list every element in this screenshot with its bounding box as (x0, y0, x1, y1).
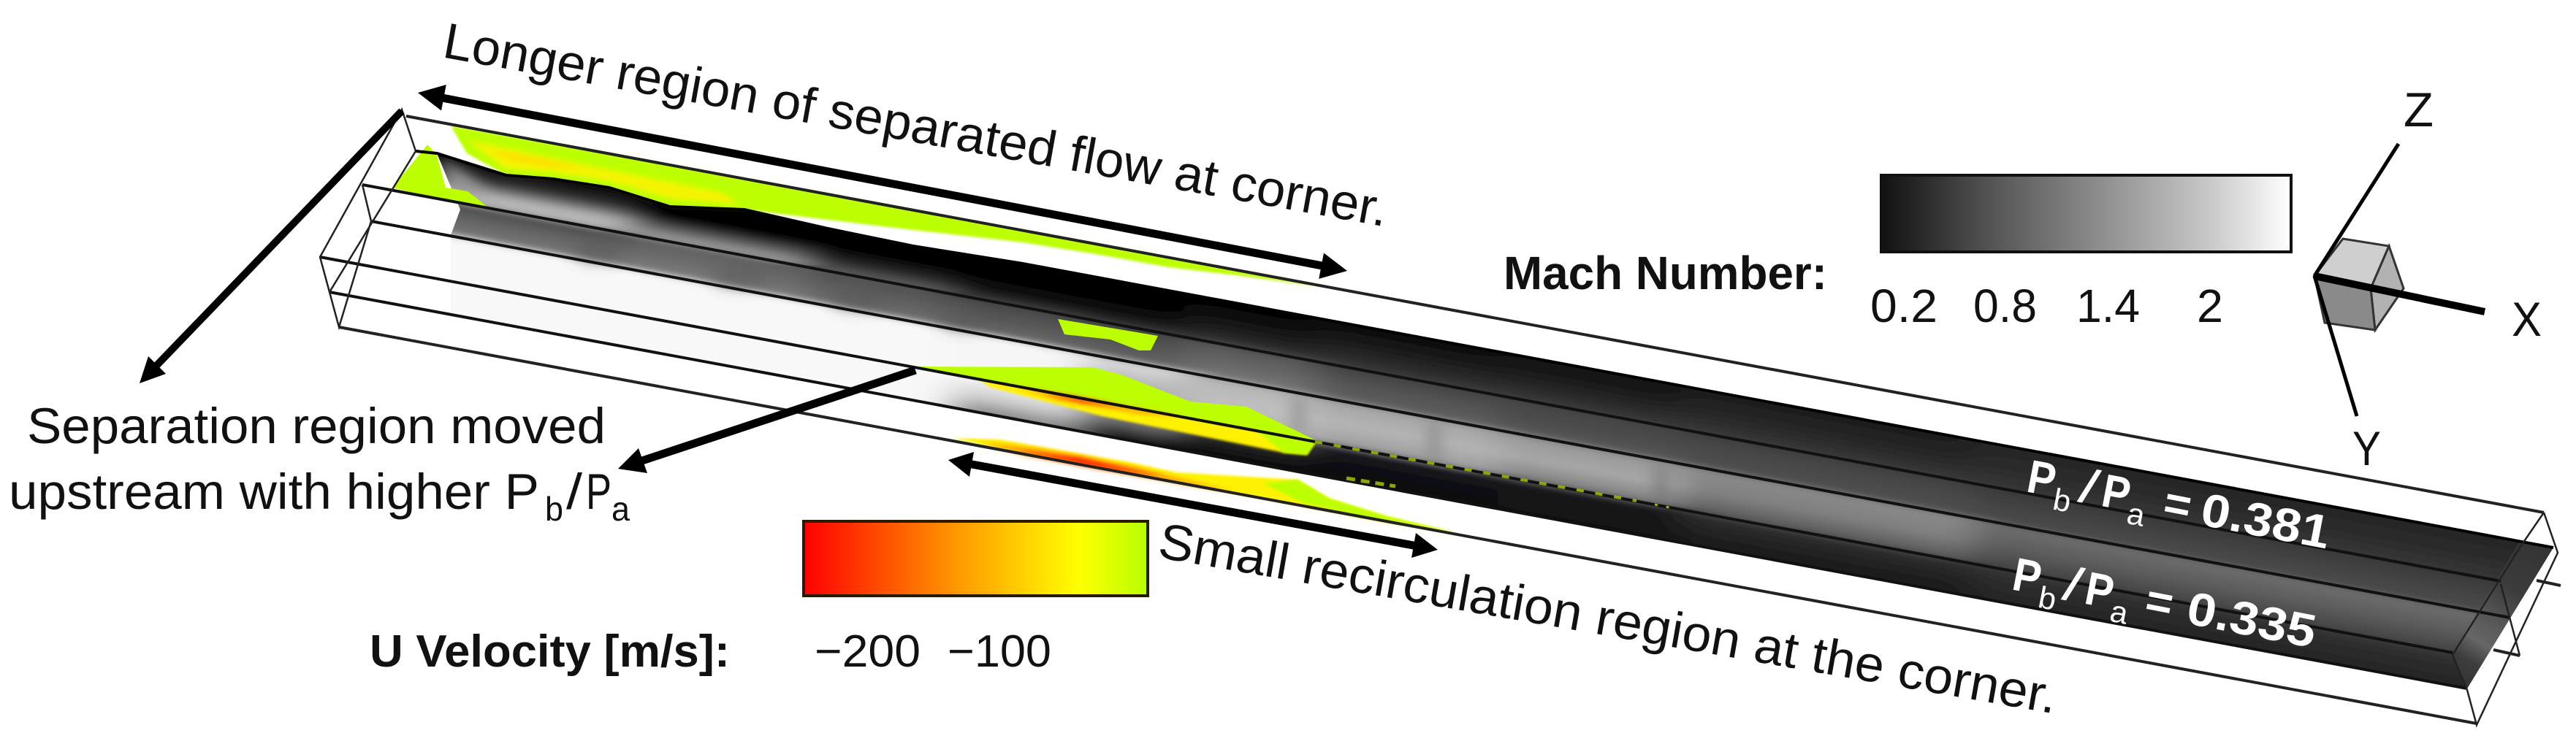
annotation: separation region moved upstream: / (566, 464, 583, 520)
icon: orientation axes with cube (2314, 83, 2542, 475)
label: Pb/Pa = 0.335: b (2035, 580, 2059, 617)
U velocity legend (370, 521, 1148, 677)
Mach number legend: Mach Number: (1504, 247, 1827, 299)
small green patch on the side wall (1058, 319, 1158, 350)
corner recirculation below centre line (979, 380, 1316, 455)
label: Pb/Pa = 0.335: a (2107, 594, 2132, 631)
icon: orientation axes with cube: Z (2404, 83, 2434, 137)
label: Pb/Pa = 0.335: 0.335 (2183, 581, 2320, 658)
Mach number legend: 2 (2197, 280, 2223, 332)
right end cap of the duct (2453, 541, 2553, 688)
arrow: longer separated region (double headed) (418, 85, 1347, 279)
label: Pb/Pa = 0.335 (2007, 546, 2321, 667)
icon: orientation axes with cube: Y (2352, 421, 2381, 475)
U velocity legend: U Velocity [m/s]: (370, 626, 730, 677)
annotation: separation region moved upstream: P (586, 464, 611, 520)
label: Pb/Pa = 0.335: / (2059, 556, 2089, 613)
label: Pb/Pa = 0.335: = (2141, 573, 2178, 630)
wireframe of the duct (320, 110, 2561, 725)
arrow: small recirculation region (double headed) (948, 452, 1438, 558)
label: Pb/Pa = 0.381 (2021, 448, 2335, 567)
green dotted trace along the corner line (1315, 442, 1673, 508)
yellow and orange core of upper separated flow (468, 140, 738, 204)
annotation: small recirculation: Small recirculation region at the corner. (1154, 513, 2062, 724)
icon: orientation axes with cube: X (2512, 292, 2542, 346)
label: Pb/Pa = 0.381: 0.381 (2197, 483, 2334, 559)
lower corner recirculation with red core (953, 438, 1456, 533)
annotation: separation region moved upstream (9, 398, 630, 528)
label: Pb/Pa = 0.381: a (2125, 496, 2149, 533)
arrow: separation region moved upstream (618, 370, 915, 473)
U velocity legend: −200 (815, 626, 921, 677)
Mach number legend: 0.2 (1870, 280, 1937, 332)
label: Pb/Pa = 0.381: b (2050, 482, 2074, 519)
label: Pb/Pa = 0.381: P (2023, 450, 2060, 507)
label: Pb/Pa = 0.335: P (2081, 561, 2119, 618)
Mach number legend (1504, 175, 2291, 332)
label: Pb/Pa = 0.335: P (2008, 548, 2046, 605)
U velocity legend: −100 (948, 626, 1051, 677)
annotation: longer region: Longer region of separated flow at corner. (439, 12, 1392, 237)
label: Pb/Pa = 0.381: = (2160, 476, 2196, 532)
Mach number legend: 0.8 (1973, 280, 2037, 332)
annotation: separation region moved upstream: Separation region moved (27, 398, 606, 454)
label: Pb/Pa = 0.381: / (2075, 459, 2104, 515)
U velocity region: upper wall, longer separation (451, 126, 1326, 288)
Mach number contour field in the duct (437, 155, 2553, 688)
annotation: separation region moved upstream: a (611, 490, 630, 528)
label: Pb/Pa = 0.381: P (2098, 464, 2135, 521)
Mach number legend: 1.4 (2076, 280, 2140, 332)
corner recirculation above centre line (915, 367, 1316, 442)
arrow: from duct corner to the lower left (140, 111, 402, 383)
annotation: separation region moved upstream: upstream with higher P (9, 464, 539, 520)
left green separation wedge (392, 145, 488, 207)
annotation: separation region moved upstream: b (545, 490, 563, 528)
